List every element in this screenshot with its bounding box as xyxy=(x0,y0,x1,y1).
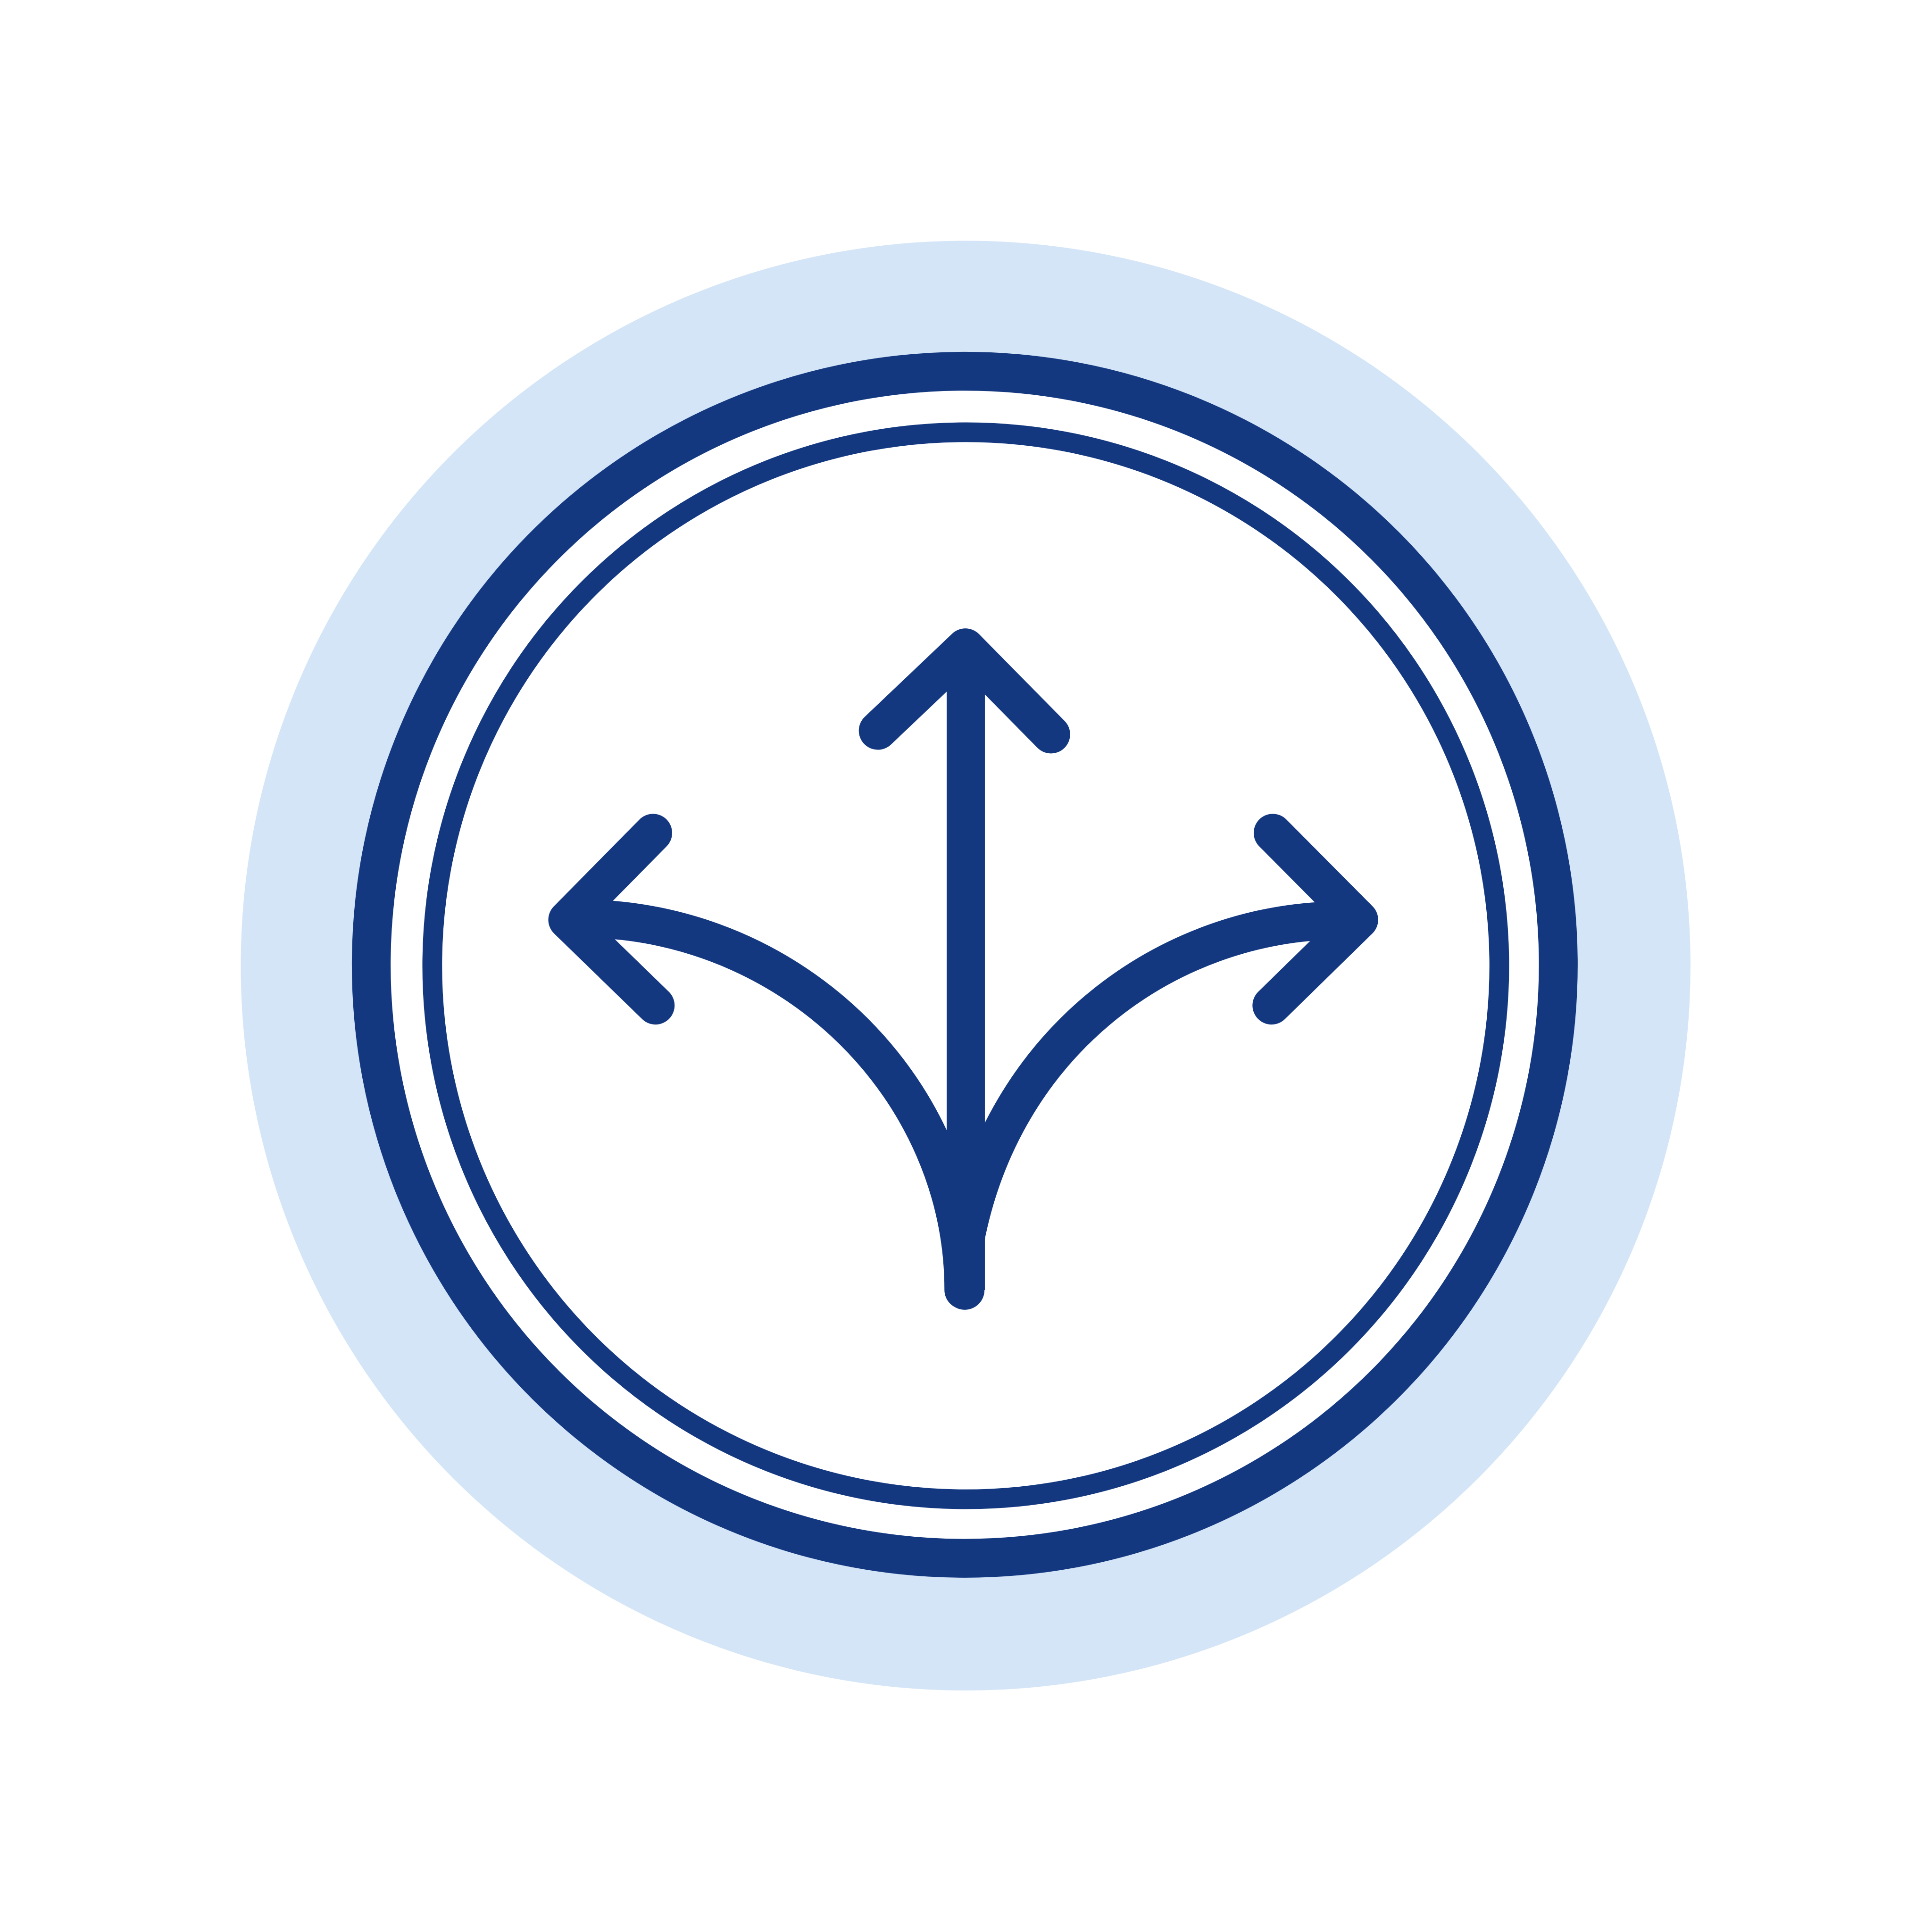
inner dark ring xyxy=(432,432,1499,1499)
arrows: split in three directions xyxy=(567,648,1359,1310)
white inner disc with outer dark ring xyxy=(371,371,1558,1558)
arrow: curving right xyxy=(962,833,1359,1257)
light blue background circle xyxy=(241,241,1690,1690)
arrow: curving left xyxy=(567,833,964,1290)
arrow: straight up xyxy=(878,648,1051,1310)
